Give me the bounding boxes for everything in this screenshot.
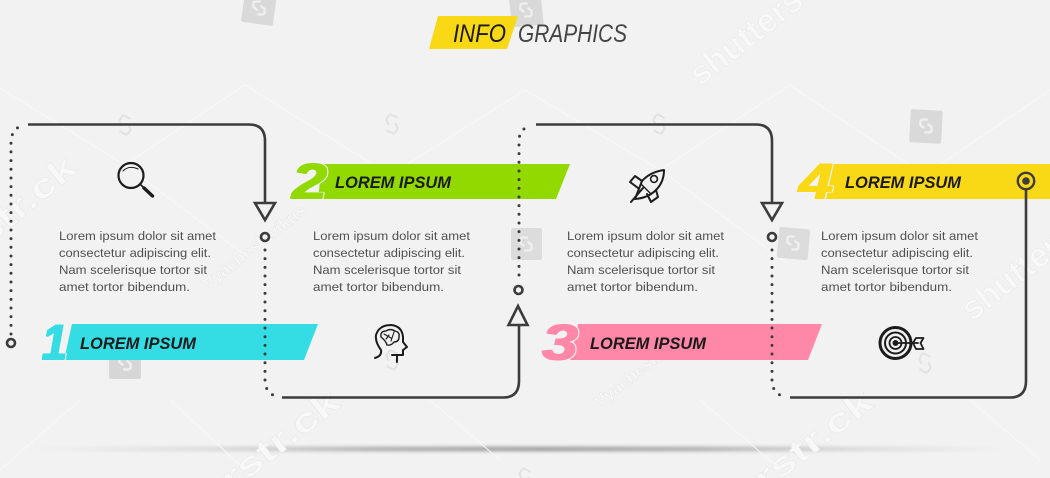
panel 2 body text: Nam scelerisque tortor sit <box>313 263 462 277</box>
panel 1 banner: 1 <box>42 314 67 370</box>
step 4 connector <box>768 173 1034 398</box>
panel 1 body text: amet tortor bibendum. <box>59 280 190 294</box>
panel 4 body text: Lorem ipsum dolor sit amet <box>821 229 979 243</box>
title: INFO <box>453 20 506 48</box>
panel 1 banner <box>42 314 318 370</box>
step 2 connector <box>261 233 528 398</box>
panel 3 banner: LOREM IPSUM <box>590 334 707 353</box>
panel 4 body text <box>821 229 979 294</box>
panel 4 body text: Nam scelerisque tortor sit <box>821 263 970 277</box>
panel 3 body text: amet tortor bibendum. <box>567 280 698 294</box>
watermark pattern: Vyacheslavikus <box>199 201 310 293</box>
panel 2 banner: 2 <box>291 154 327 210</box>
panel 2 body text: consectetur adipiscing elit. <box>313 246 465 260</box>
panel 4 banner <box>798 154 1050 210</box>
icon: head with brain <box>375 325 407 362</box>
step 1 connector <box>7 124 275 347</box>
icon: magnifying glass <box>118 163 152 196</box>
panel 1 body text: Nam scelerisque tortor sit <box>59 263 208 277</box>
panel 3 banner: 3 <box>542 314 578 370</box>
step 3 connector <box>514 124 782 294</box>
panel 1 body text: consectetur adipiscing elit. <box>59 246 211 260</box>
panel 4 body text: amet tortor bibendum. <box>821 280 952 294</box>
icon: rocket <box>630 170 664 202</box>
title: GRAPHICS <box>518 20 627 48</box>
icon: target with arrow <box>880 328 924 358</box>
panel 1 body text: Lorem ipsum dolor sit amet <box>59 229 217 243</box>
panel 3 body text <box>567 229 725 294</box>
panel 3 body text: Lorem ipsum dolor sit amet <box>567 229 725 243</box>
ground shadow <box>30 446 1005 452</box>
panel 4 body text: consectetur adipiscing elit. <box>821 246 973 260</box>
panel 2 body text <box>313 229 471 294</box>
panel 2 body text: amet tortor bibendum. <box>313 280 444 294</box>
panel 2 banner <box>291 154 570 210</box>
panel 1 banner: LOREM IPSUM <box>80 334 197 353</box>
panel 1 body text <box>59 229 217 294</box>
panel 3 body text: consectetur adipiscing elit. <box>567 246 719 260</box>
panel 2 body text: Lorem ipsum dolor sit amet <box>313 229 471 243</box>
panel 3 banner <box>542 314 822 370</box>
watermark pattern: Vyacheslavikus <box>591 319 702 411</box>
title <box>429 16 627 49</box>
panel 2 banner: LOREM IPSUM <box>335 173 452 192</box>
panel 4 banner: 4 <box>798 154 833 210</box>
panel 3 body text: Nam scelerisque tortor sit <box>567 263 716 277</box>
panel 4 banner: LOREM IPSUM <box>845 173 962 192</box>
